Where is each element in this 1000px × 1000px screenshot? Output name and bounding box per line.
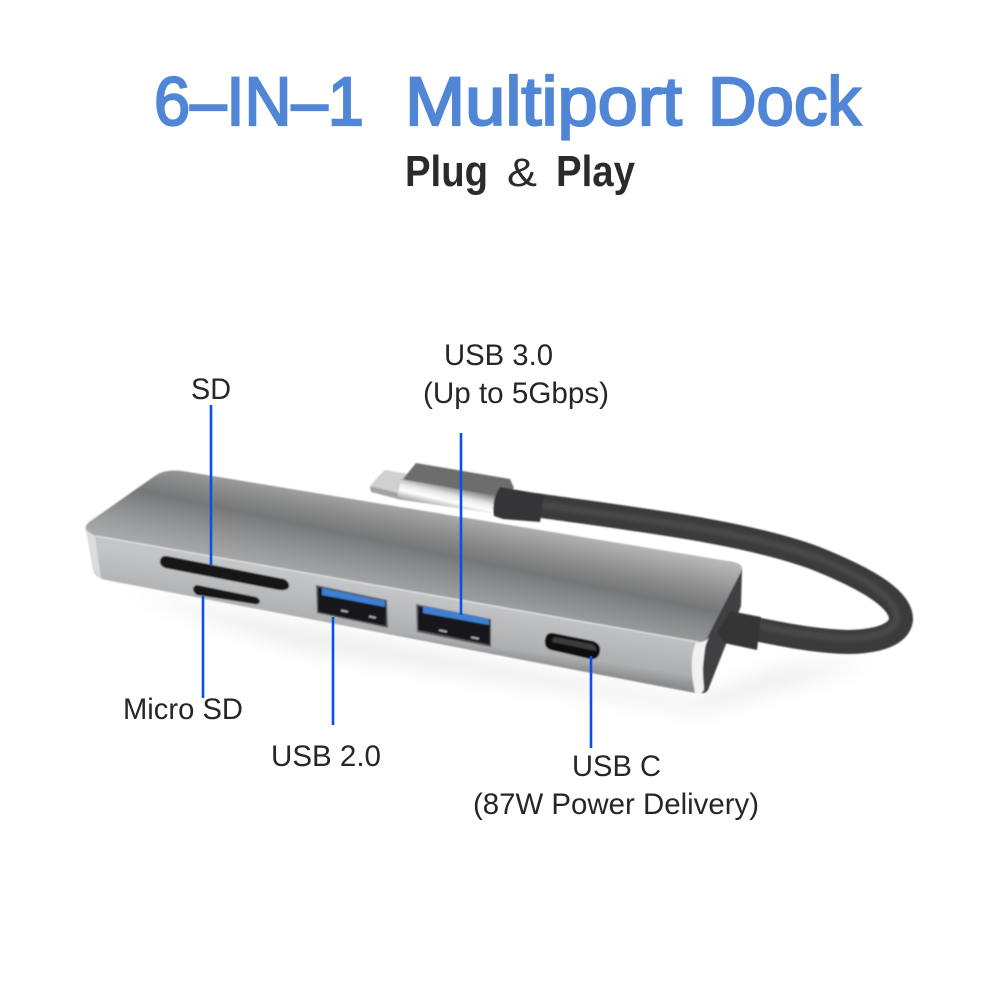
top edge highlight <box>96 536 698 642</box>
title: 6–IN–1 <box>154 63 364 140</box>
pointer line: SD <box>210 405 212 565</box>
label: USB 3.0: USB 3.0 <box>444 339 553 372</box>
label: 87W Power Delivery: (87W Power Delivery) <box>473 788 759 821</box>
cable strain relief: plug side <box>493 487 544 522</box>
strain relief: dock side <box>717 611 761 650</box>
cable <box>535 504 901 642</box>
subtitle: Play <box>556 147 635 196</box>
USB 3.0 port <box>416 604 491 647</box>
title <box>154 63 861 140</box>
USB-C plug metal housing <box>397 463 514 513</box>
subtitle <box>405 147 635 196</box>
USB 2.0 port <box>316 585 388 628</box>
dock body: front face <box>86 530 710 693</box>
pointer line: Micro SD <box>202 596 204 698</box>
subtitle: & <box>507 151 537 195</box>
label: Micro SD: Micro SD <box>123 693 243 726</box>
title: Multiport <box>405 63 682 140</box>
dock body: right side <box>700 570 742 693</box>
front left highlight <box>86 530 101 579</box>
label: USB 2.0: USB 2.0 <box>271 740 381 773</box>
SD card slot <box>160 556 289 590</box>
pointer line: USB C <box>590 656 592 748</box>
label: SD: SD <box>191 373 231 406</box>
title: Dock <box>708 63 861 140</box>
label: up to 5Gbps: (Up to 5Gbps) <box>423 377 609 410</box>
USB C port <box>545 633 600 659</box>
pointer line: USB 2.0 <box>332 617 334 725</box>
subtitle: Plug <box>405 147 488 196</box>
product: multiport dock <box>86 463 901 712</box>
USB-C plug tip <box>370 470 408 498</box>
label: USB C: USB C <box>572 750 661 783</box>
pointer line: USB 3.0 <box>460 433 462 615</box>
dock body: top face <box>86 471 742 642</box>
drop shadow <box>120 590 880 712</box>
Micro SD slot <box>193 585 260 604</box>
front right highlight <box>692 636 710 693</box>
